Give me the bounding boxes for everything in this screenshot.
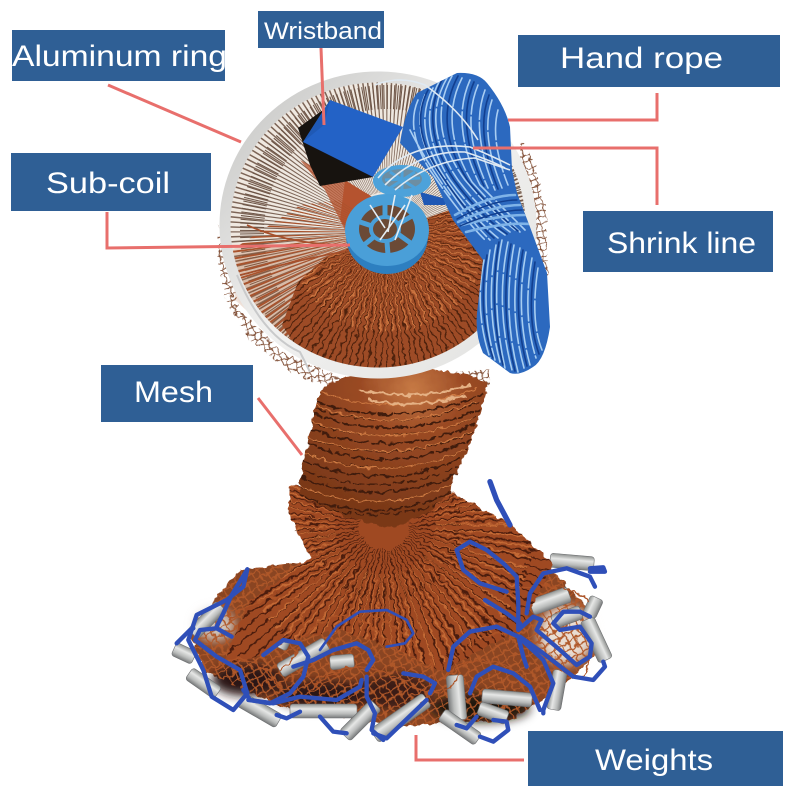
blue lead-line loops: [177, 482, 605, 742]
leader: shrink line: [473, 148, 657, 205]
label: Shrink line: Shrink line: [607, 227, 756, 260]
label: Sub-coil: [11, 153, 211, 211]
aluminum ring and disc: [220, 77, 531, 380]
leader: sub-coil: [107, 212, 350, 248]
label: Hand rope: [518, 35, 780, 87]
label: Mesh: Mesh: [134, 376, 213, 409]
label: Aluminum ring: [12, 30, 227, 81]
curved strands over skirt: [215, 585, 590, 705]
solid fan of mesh below the knot: [222, 484, 552, 671]
hand rope coil: [400, 73, 550, 374]
leader: aluminum ring: [108, 85, 241, 142]
sub-coil small hub: [373, 165, 450, 205]
leader: wristband: [321, 48, 324, 125]
label: Sub-coil: Sub-coil: [46, 167, 170, 200]
loose mesh and shadow at the base: [188, 562, 600, 726]
label: Weights: [528, 731, 783, 786]
wristband: [298, 100, 403, 186]
neck of bundled mesh: [290, 370, 488, 527]
leader: hand rope: [508, 93, 657, 120]
sub-coil large hub: [345, 194, 429, 274]
label: Shrink line: [583, 211, 773, 272]
cast net photo illustration: [107, 48, 657, 760]
leader lines: [107, 48, 657, 760]
leader: weights: [416, 735, 524, 760]
label: Wristband: [258, 11, 384, 48]
label: Hand rope: Hand rope: [560, 42, 723, 75]
outer mesh behind ring: [218, 82, 548, 392]
weights: [171, 553, 613, 745]
label: Wristband: Wristband: [264, 18, 382, 45]
leader: mesh: [258, 398, 302, 455]
label: Mesh: [101, 365, 253, 422]
label: Aluminum ring: Aluminum ring: [12, 40, 227, 73]
label: Weights: Weights: [595, 744, 713, 777]
shrink line strands: [375, 80, 510, 190]
